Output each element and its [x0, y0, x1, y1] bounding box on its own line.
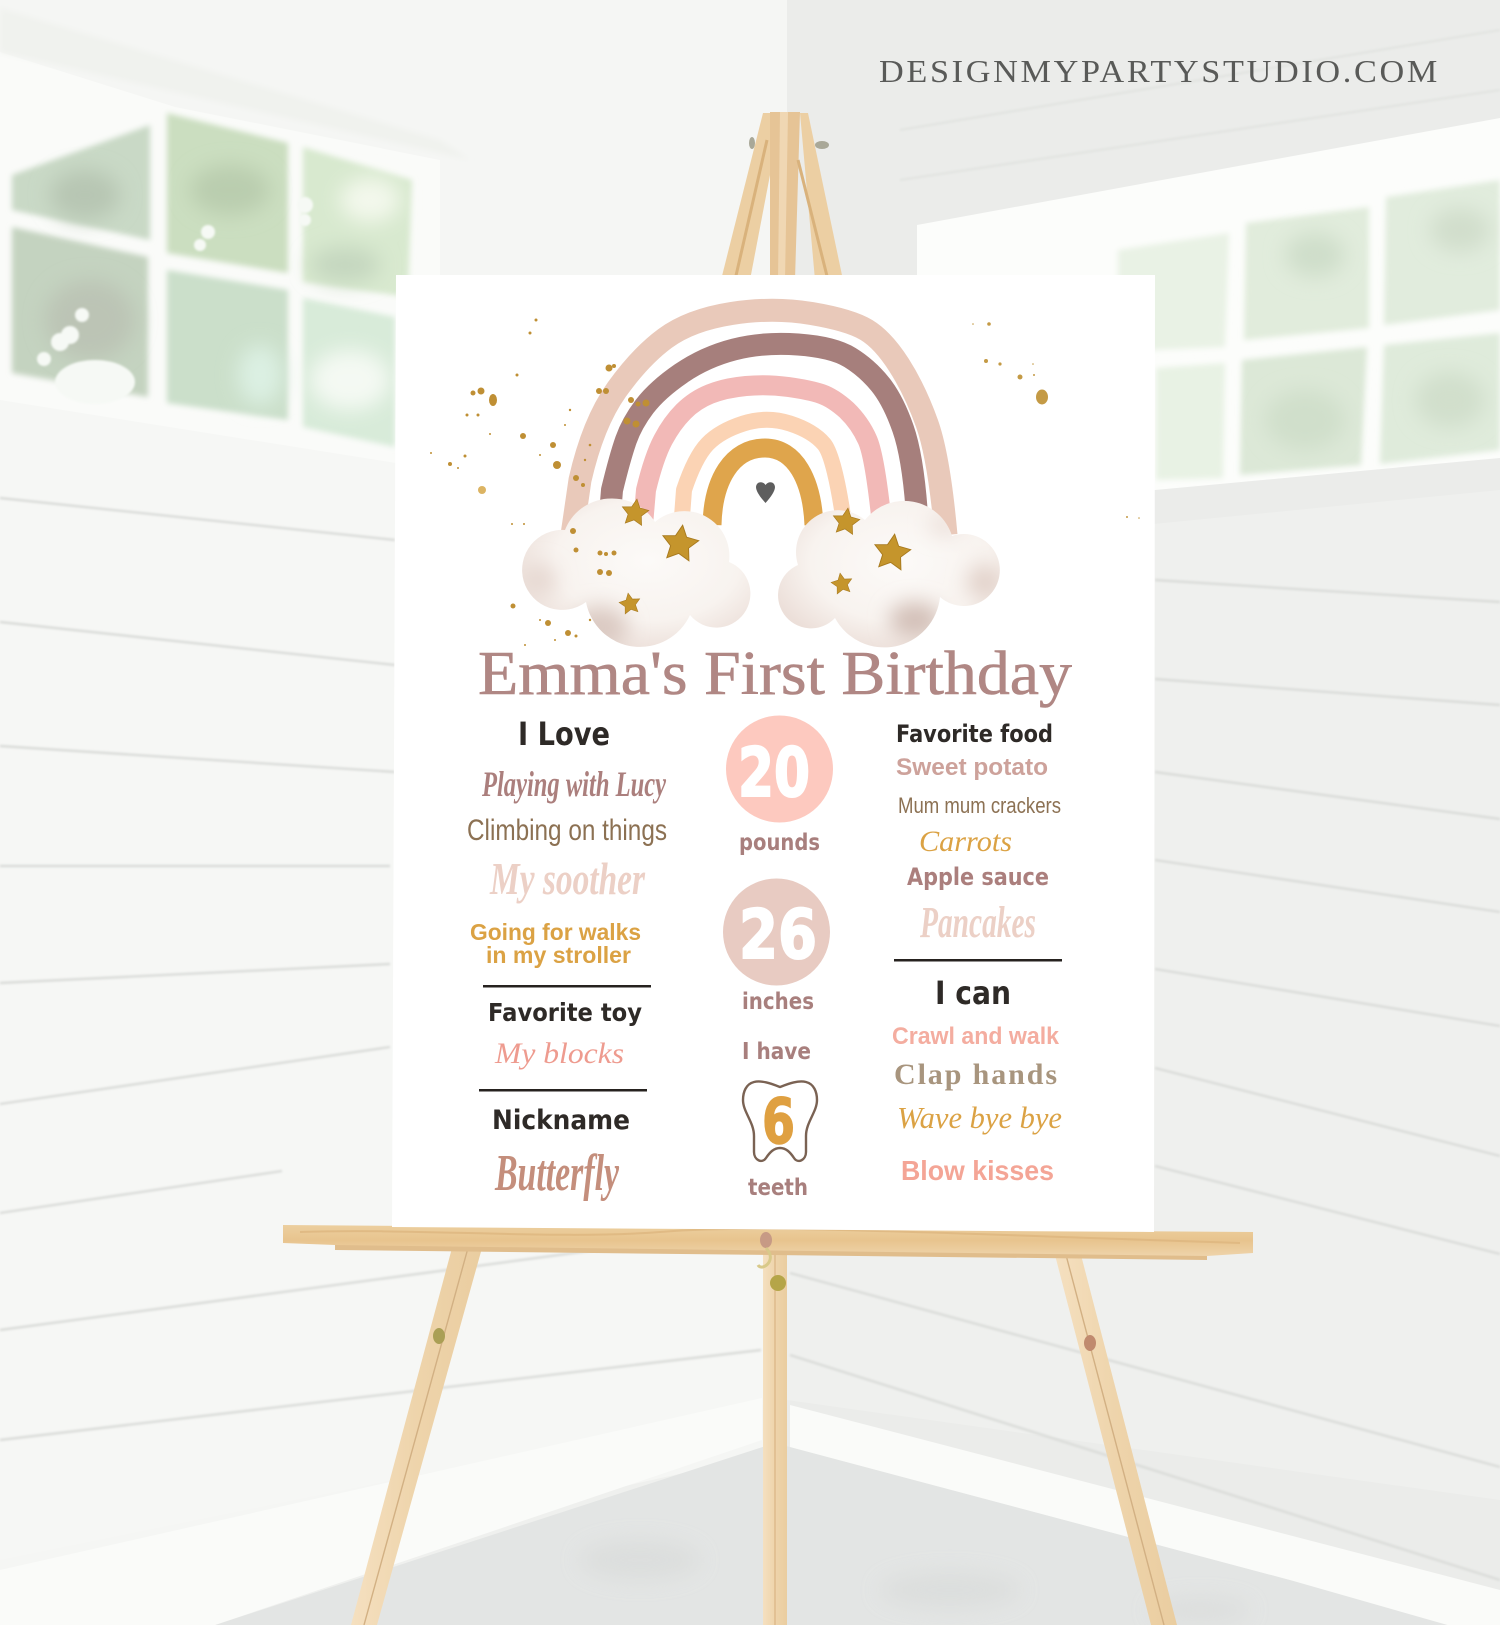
item: going for walks: Going for walks	[470, 919, 641, 945]
rainbow	[572, 310, 946, 535]
cloud right	[778, 501, 1003, 647]
item: my blocks: My blocks	[494, 1037, 624, 1070]
heading: I Love: I Love	[518, 715, 610, 753]
column: I can	[892, 974, 1062, 1186]
item: playing with Lucy: Playing with Lucy	[481, 764, 667, 804]
item: mum mum crackers: Mum mum crackers	[898, 793, 1061, 818]
heading: favorite food: Favorite food	[896, 720, 1053, 748]
baseboards	[0, 1398, 1500, 1625]
easel: legs	[351, 1248, 1177, 1625]
title: Emma's First Birthday	[478, 640, 1072, 708]
floor	[215, 1443, 1500, 1625]
column: favorite toy	[488, 998, 642, 1070]
item: butterfly: Butterfly	[494, 1145, 620, 1202]
label: pounds: pounds	[739, 830, 820, 856]
divider	[894, 959, 1062, 962]
cloud left	[520, 498, 750, 650]
label: inches: inches	[742, 989, 814, 1015]
heading: favorite toy: Favorite toy	[488, 998, 642, 1027]
item: carrots: Carrots	[919, 825, 1012, 858]
icon: tooth	[743, 1081, 817, 1161]
easel: shelf	[283, 1225, 1253, 1260]
item: wave bye bye: Wave bye bye	[897, 1100, 1062, 1135]
stat: weight: 20	[738, 734, 810, 813]
heading: I can: I can	[935, 974, 1011, 1012]
left window	[0, 8, 470, 470]
stat: teeth	[742, 1039, 817, 1201]
label: I have: I have	[742, 1039, 811, 1065]
divider	[483, 985, 651, 988]
item: my soother: My soother	[489, 853, 646, 904]
item: sweet potato: Sweet potato	[896, 754, 1048, 781]
item: crawl and walk: Crawl and walk	[892, 1023, 1060, 1050]
item: pancakes: Pancakes	[919, 898, 1036, 947]
gold stars	[618, 497, 913, 615]
gold splatter right	[972, 322, 1140, 519]
gold splatter left	[430, 318, 650, 646]
item: apple sauce: Apple sauce	[907, 863, 1049, 891]
column: I love	[467, 715, 667, 968]
heading: nickname: Nickname	[492, 1105, 630, 1136]
easel: bolts and hook	[433, 1232, 1096, 1351]
stat: weight	[726, 716, 833, 856]
item: in my stroller: in my stroller	[486, 942, 631, 968]
icon: heart	[756, 482, 775, 503]
right window	[917, 118, 1500, 500]
number: 6: 6	[762, 1085, 795, 1158]
item: blow kisses: Blow kisses	[901, 1155, 1054, 1186]
easel: top of legs	[721, 112, 843, 280]
column: favorite food	[896, 720, 1061, 947]
poster panel	[392, 275, 1155, 1232]
item: climbing on things: Climbing on things	[467, 814, 667, 847]
item: clap hands: Clap hands	[894, 1058, 1057, 1091]
label: teeth: teeth	[748, 1175, 808, 1201]
stat: height	[723, 878, 830, 1015]
watermark text: DESIGNMYPARTYSTUDIO.COM	[879, 53, 1440, 89]
divider	[479, 1089, 647, 1092]
column: nickname	[492, 1105, 630, 1202]
stat: height: 26	[739, 896, 817, 975]
